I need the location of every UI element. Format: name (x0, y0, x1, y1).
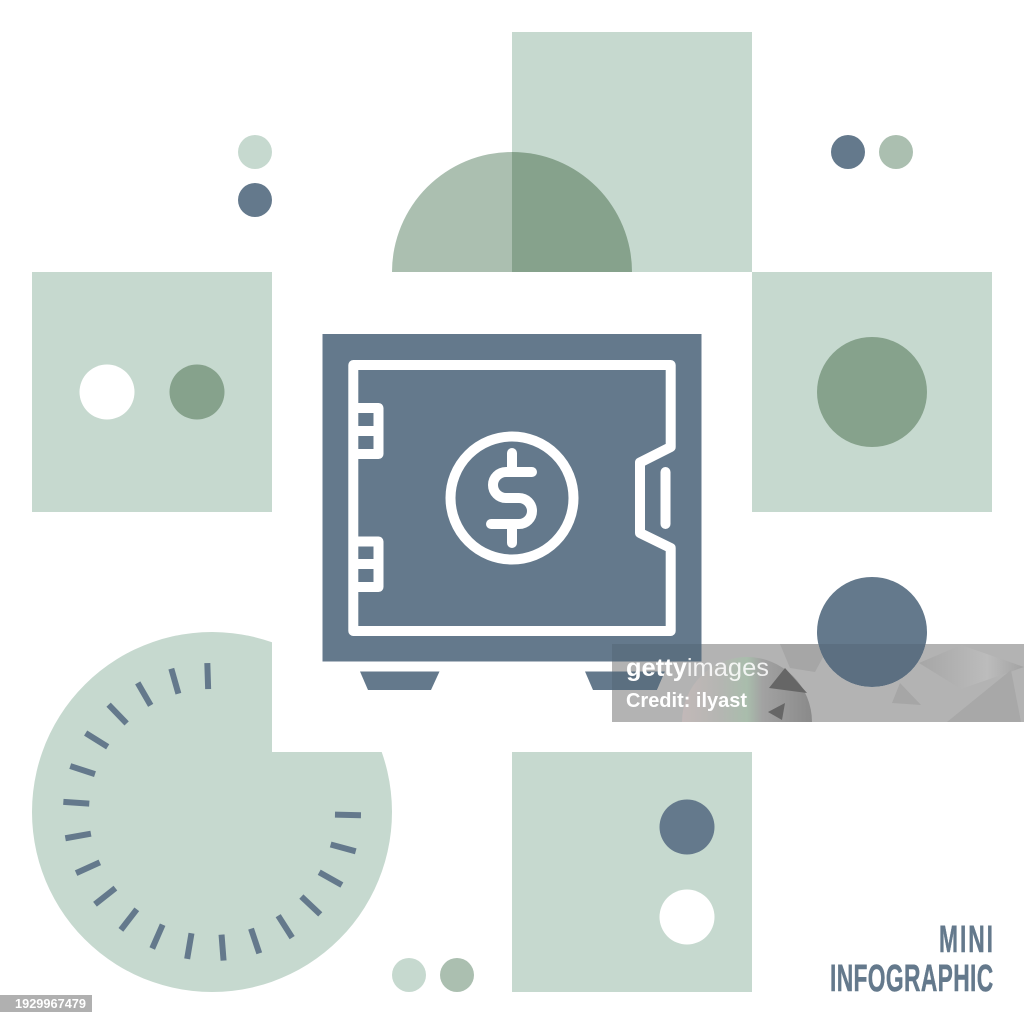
image id strip (0, 995, 92, 1012)
chart: dial with tick marks (32, 632, 392, 992)
watermark shade over navy shapes (612, 644, 926, 690)
panel: top square with semicircle (392, 32, 752, 272)
dots: bottom pair (392, 958, 474, 992)
panel: bottom square with two dots (512, 752, 752, 992)
title: mini infographic (830, 918, 993, 999)
image id strip: 1929967479 (15, 997, 86, 1011)
panel: left square with two dots (32, 272, 272, 512)
watermark text: gettyimages (626, 654, 769, 682)
watermark text: Credit: ilyast (626, 689, 747, 712)
title: mini infographic: MINI (939, 918, 993, 960)
title: mini infographic: INFOGRAPHIC (830, 957, 993, 999)
watermark band (612, 644, 1024, 722)
icon: money safe (322, 334, 702, 690)
panel: right square with circle (752, 272, 992, 512)
dots: top right pair (831, 135, 913, 169)
navy circle (817, 577, 927, 687)
dots: top left pair (238, 135, 272, 217)
watermark text (626, 654, 769, 712)
icon: dollar coin (450, 436, 574, 560)
